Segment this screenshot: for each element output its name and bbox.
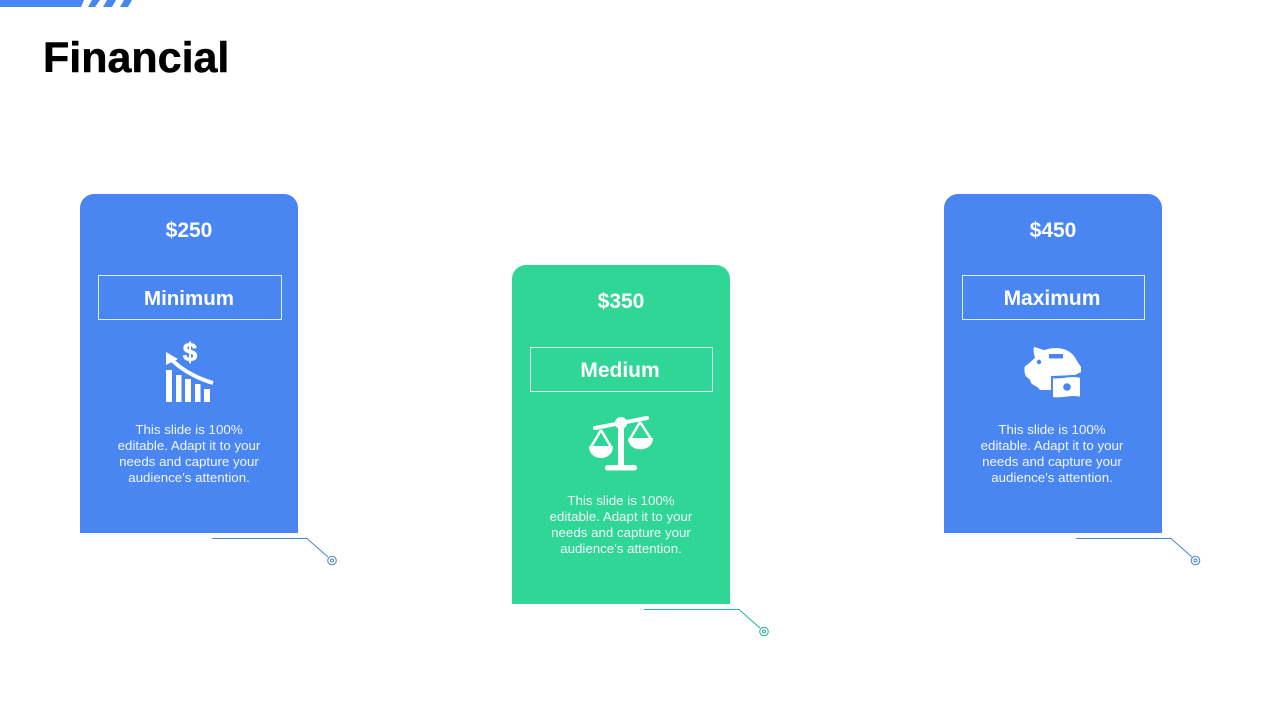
icon: piggy bank with banknote [1024, 347, 1081, 398]
minimum description [118, 422, 260, 485]
leader line: minimum [212, 538, 337, 566]
maximum description: audience's attention. [991, 470, 1113, 485]
icon: falling bars with dollar [166, 337, 214, 402]
medium label: Medium [580, 359, 660, 382]
minimum description: editable. Adapt it to your [118, 438, 260, 453]
leader line: medium [644, 609, 769, 636]
medium amount: $350 [598, 290, 644, 313]
icon: falling bars with dollar: $ [183, 337, 198, 367]
maximum description: needs and capture your [982, 454, 1122, 469]
maximum description: This slide is 100% [998, 422, 1106, 437]
maximum description: editable. Adapt it to your [981, 438, 1123, 453]
maximum label: Maximum [1004, 287, 1100, 310]
minimum description: audience's attention. [128, 470, 250, 485]
minimum description: needs and capture your [119, 454, 259, 469]
header accent bar [0, 0, 132, 7]
panel: minimum [80, 194, 298, 533]
panel: maximum [944, 194, 1162, 533]
panel: medium [512, 265, 730, 604]
medium description: needs and capture your [551, 525, 691, 540]
medium description: audience's attention. [560, 541, 682, 556]
maximum description [981, 422, 1124, 485]
minimum description: This slide is 100% [135, 422, 243, 437]
medium description: editable. Adapt it to your [550, 509, 692, 524]
minimum amount: $250 [166, 219, 212, 242]
medium description [550, 493, 692, 556]
minimum label [98, 275, 282, 320]
leader line: maximum [1076, 538, 1200, 566]
maximum amount: $450 [1030, 219, 1076, 242]
icon: balance scale [589, 416, 653, 470]
medium description: This slide is 100% [567, 493, 675, 508]
maximum label [962, 275, 1145, 320]
medium label [530, 347, 713, 392]
minimum label: Minimum [144, 287, 234, 310]
title: Financial [43, 34, 229, 82]
